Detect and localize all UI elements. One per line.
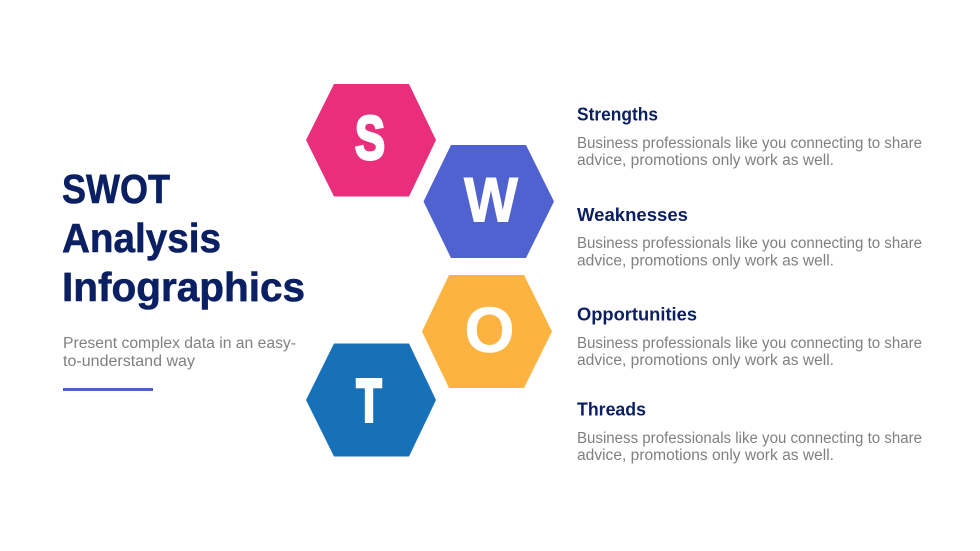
title — [62, 166, 305, 310]
subtitle: to-understand way — [63, 353, 195, 370]
item: Opportunities — [577, 304, 922, 369]
hexagon: T — [306, 344, 436, 456]
title: Analysis — [62, 215, 221, 261]
item: Threads: Threads — [577, 400, 646, 420]
hexagon: T: T — [356, 368, 382, 434]
item: Strengths: Strengths — [577, 104, 658, 124]
title: SWOT — [62, 166, 170, 212]
hexagon: O — [422, 275, 552, 388]
item: Opportunities: Opportunities — [577, 304, 697, 324]
item: Threads: advice, promotions only work as well. — [577, 447, 834, 464]
hexagon: W — [424, 145, 554, 258]
item: Strengths: advice, promotions only work as well. — [577, 152, 834, 169]
subtitle: Present complex data in an easy- — [63, 335, 296, 352]
item: Opportunities: advice, promotions only work as well. — [577, 352, 834, 369]
item: Weaknesses: advice, promotions only work as well. — [577, 252, 834, 270]
item: Opportunities: Business professionals like you connecting to share — [577, 335, 922, 352]
item: Threads — [577, 400, 922, 464]
subtitle — [63, 335, 296, 370]
hexagon: O: O — [464, 294, 514, 366]
item: Weaknesses: Weaknesses — [577, 205, 688, 225]
item: Strengths — [577, 104, 922, 169]
item: Weaknesses: Business professionals like you connecting to share — [577, 235, 922, 252]
hexagon: S: S — [355, 104, 385, 172]
item: Threads: Business professionals like you connecting to share — [577, 430, 922, 447]
item: Weaknesses — [577, 205, 922, 270]
accent bar — [63, 388, 153, 391]
title: Infographics — [62, 264, 305, 310]
hexagon: S — [306, 84, 436, 196]
item: Strengths: Business professionals like you connecting to share — [577, 135, 922, 152]
hexagon: W: W — [464, 166, 518, 236]
